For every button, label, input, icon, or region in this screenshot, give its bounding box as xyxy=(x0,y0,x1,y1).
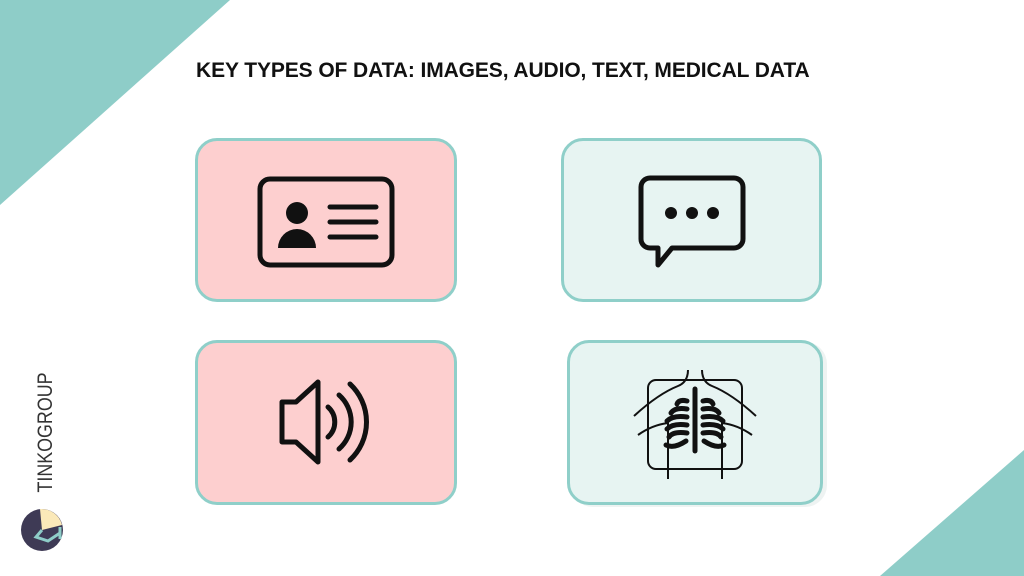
logo: tinkogroup xyxy=(21,372,63,551)
icon: chat bubble xyxy=(638,176,746,268)
icon: speaker xyxy=(280,380,369,464)
panel: text xyxy=(561,138,822,302)
panel: medical xyxy=(567,340,823,505)
logo mark xyxy=(21,509,63,551)
icon: chest x-ray xyxy=(633,370,757,479)
icon: id card xyxy=(258,176,394,268)
title: KEY TYPES OF DATA: IMAGES, AUDIO, TEXT, MEDICAL DATA xyxy=(196,59,810,82)
panel: audio xyxy=(195,340,457,505)
panel: images xyxy=(195,138,457,302)
logo text: TINKOGROUP xyxy=(34,372,57,492)
